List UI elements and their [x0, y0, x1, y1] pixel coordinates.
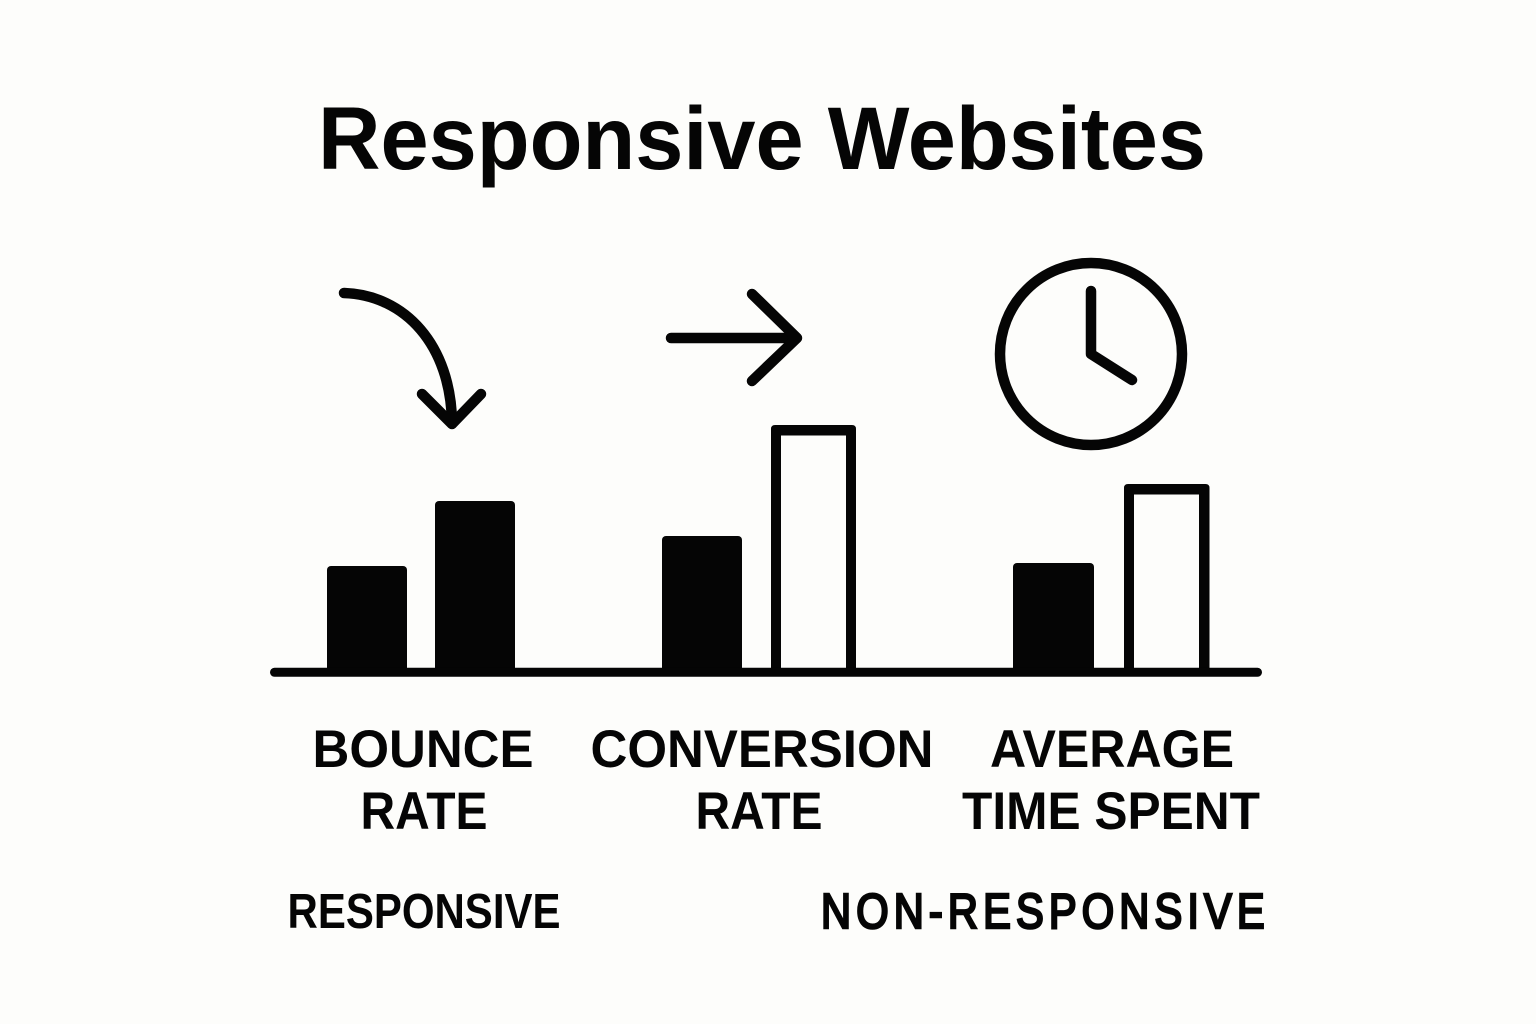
label: conversion rate: [590, 720, 934, 841]
icon: right arrow: [671, 294, 797, 381]
label: bounce rate: [312, 720, 534, 841]
label: bounce rate: RATE: [360, 782, 488, 841]
chart baseline: [274, 668, 1258, 677]
bar: conversion rate non-responsive: [771, 425, 856, 672]
bar: time spent non-responsive: [1124, 484, 1210, 672]
legend: non-responsive: NON-RESPONSIVE: [821, 884, 1265, 939]
label: average time spent: TIME SPENT: [962, 782, 1260, 841]
title: Responsive Websites: [318, 88, 1206, 188]
icon: clock: [1000, 263, 1182, 445]
label: average time spent: AVERAGE: [990, 720, 1234, 779]
icon: curved down arrow: [344, 293, 481, 424]
label: bounce rate: BOUNCE: [312, 720, 534, 779]
bar chart: [274, 425, 1258, 672]
label: conversion rate: CONVERSION: [590, 720, 934, 779]
label: conversion rate: RATE: [696, 782, 822, 841]
bar: time spent responsive: [1013, 563, 1094, 672]
legend: responsive: RESPONSIVE: [288, 885, 560, 939]
bar: bounce rate responsive: [327, 566, 407, 672]
bar: conversion rate responsive: [662, 536, 742, 672]
bar: bounce rate non-responsive: [435, 501, 515, 672]
label: average time spent: [962, 720, 1260, 841]
